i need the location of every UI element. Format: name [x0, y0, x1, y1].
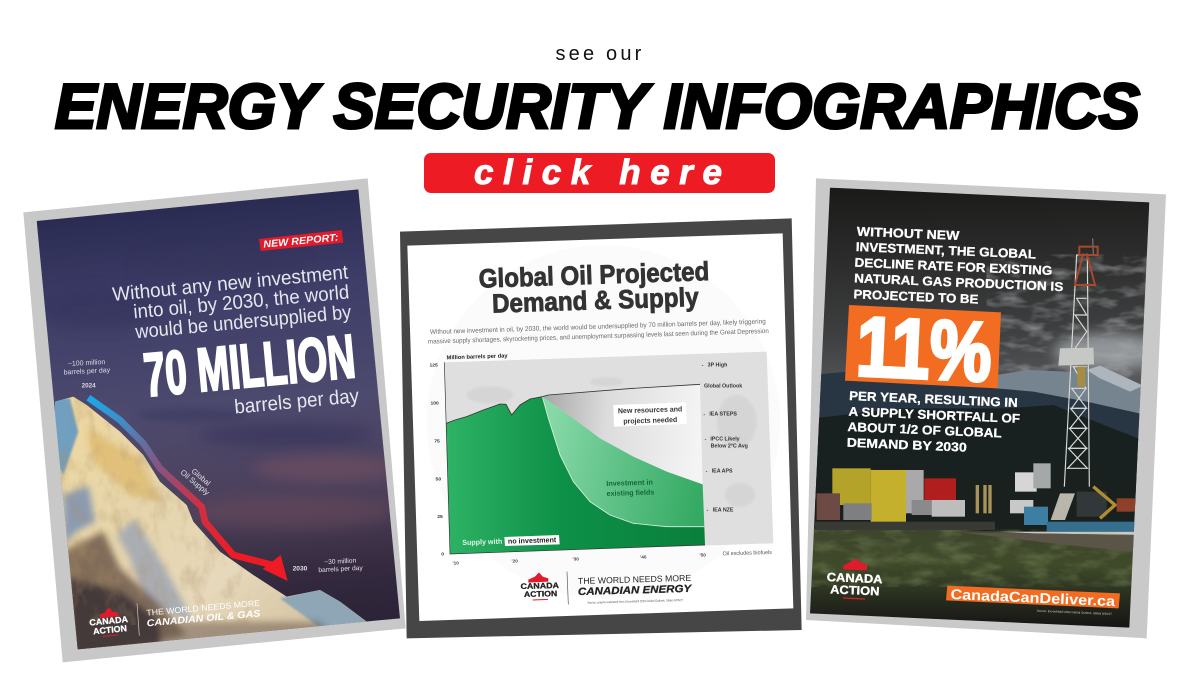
y axis labels: [430, 363, 444, 558]
headline: Without any new investment: [111, 261, 350, 306]
investment in existing fields area: [542, 397, 704, 527]
chart title: Demand & Supply: [492, 282, 699, 319]
scenario labels: -: [706, 469, 708, 475]
ground: [807, 528, 1140, 632]
kicker: see our: see our: [555, 43, 645, 65]
scenario labels: IEA NZE: [713, 507, 734, 513]
source note: Source: ExxonMobil 2023 Global Outlook, Slides 8/26/27: [1037, 609, 1112, 616]
new resources label: New resources and: [618, 404, 682, 415]
y axis labels: 100: [431, 401, 439, 407]
scenario labels: IEA APS: [712, 469, 733, 475]
scenario labels: -: [705, 437, 707, 443]
barrels per day: barrels per day: [233, 385, 360, 419]
x axis labels: '50: [700, 552, 706, 557]
lower statement: DEMAND BY 2030: [847, 436, 967, 455]
scenario labels: -: [703, 412, 705, 418]
y axis labels: 25: [437, 514, 443, 520]
logo: canada action: [89, 603, 139, 636]
panel: 11 percent natural gas poster: [800, 175, 1167, 638]
lower statement: PER YEAR, RESULTING IN: [849, 389, 1018, 410]
upper statement: DECLINE RATE FOR EXISTING: [854, 256, 1053, 278]
new resources label: projects needed: [623, 415, 677, 426]
supply with no investment area: [446, 397, 705, 554]
y axis labels: 125: [430, 363, 438, 369]
poster paper: [407, 233, 793, 621]
declining supply arrow: [88, 398, 288, 581]
end label 2030: [293, 557, 364, 574]
x axis labels: '20: [512, 559, 518, 564]
chart title: Global Oil Projected: [478, 256, 710, 294]
scenario labels: -: [702, 363, 704, 369]
start label 2024: [63, 359, 111, 389]
decline curve line: [542, 397, 704, 527]
chart subtitle: [428, 318, 769, 346]
click here button: [424, 153, 775, 193]
upper statement: NATURAL GAS PRODUCTION IS: [854, 271, 1064, 294]
upper statement: WITHOUT NEW: [857, 225, 960, 243]
big number: 70 million: 70 MILLION: [141, 321, 358, 409]
start label 2024: ~100 million: [68, 359, 106, 368]
end label 2030: barrels per day: [318, 565, 364, 574]
tagline: THE WORLD NEEDS MORE: [578, 573, 692, 586]
global oil supply label: Global: [190, 467, 213, 488]
scenario labels: IPCC Likely: [710, 436, 740, 442]
main title: ENERGY SECURITY INFOGRAPHICS: [55, 72, 1140, 142]
no investment label: Supply with: [462, 537, 503, 547]
no investment label: no investment: [508, 535, 557, 546]
tagline: CANADIAN ENERGY: [578, 584, 693, 598]
upper statement: INVESTMENT, THE GLOBAL: [856, 240, 1037, 262]
tanks and site buildings: [815, 463, 1135, 532]
logo: canada action: [827, 558, 883, 599]
investment label: existing fields: [606, 488, 654, 498]
logo: canada action: CANADA: [520, 581, 559, 591]
start label 2024: barrels per day: [63, 367, 111, 377]
investment label: [606, 478, 654, 498]
investment label: Investment in: [606, 478, 654, 488]
website badge: CanadaCanDeliver.ca: [950, 587, 1117, 610]
y axis labels: 0: [441, 552, 444, 558]
chart subtitle: massive supply shortages, skyrocketing prices, and unemployment surpassing levels last seen during the Great Depression: [428, 328, 769, 346]
global outlook line: [446, 384, 700, 423]
axes: [444, 362, 705, 554]
x axis labels: '30: [573, 557, 579, 562]
new report badge: NEW REPORT:: [263, 232, 339, 251]
headline: would be undersupplied by: [134, 301, 352, 343]
logo: canada action: CANADA: [89, 614, 129, 628]
upper statement: [853, 225, 1064, 307]
tagline: [578, 573, 693, 598]
poster frame: [23, 178, 406, 662]
click here button: click here: [474, 153, 722, 192]
logo: canada action: ACTION: [93, 623, 127, 636]
panel: global oil demand and supply poster: [400, 218, 802, 638]
scenario labels: -: [707, 508, 709, 514]
source note: Source: graphs replicated from ExxonMobil 2023 Global Outlook, Slides 8/26/27: [587, 598, 684, 605]
x axis labels: [453, 552, 706, 566]
logo: canada action: [520, 572, 568, 604]
headline: into oil, by 2030, the world: [132, 281, 350, 323]
lower statement: ABOUT 1/2 OF GLOBAL: [847, 420, 1002, 440]
y axis title: Million barrels per day: [447, 353, 509, 361]
no investment label: [462, 535, 560, 547]
logo: canada action: ACTION: [524, 589, 558, 599]
poster frame: [400, 218, 802, 638]
lower statement: [847, 389, 1021, 455]
scenario labels: Below 2°C Avg: [711, 443, 748, 449]
poster artwork: [36, 190, 400, 650]
mountain: [54, 396, 366, 650]
end label 2030: 2030: [293, 566, 308, 573]
biofuels note: Oil excludes biofuels: [723, 550, 772, 557]
faint world map: [467, 377, 757, 507]
y axis labels: 50: [436, 476, 441, 482]
new resources label: [613, 402, 687, 427]
tagline: CANADIAN OIL & GAS: [146, 608, 261, 629]
drilling rig: [1058, 238, 1098, 487]
start label 2024: 2024: [82, 382, 96, 389]
tagline: THE WORLD NEEDS MORE: [146, 598, 261, 618]
lower statement: A SUPPLY SHORTFALL OF: [848, 405, 1021, 426]
end label 2030: ~30 million: [324, 557, 357, 566]
poster artwork: [810, 188, 1150, 628]
scenario labels: Global Outlook: [704, 384, 742, 390]
panel: 70 million poster: [20, 175, 420, 668]
faint globe: [427, 245, 780, 598]
global oil supply label: Oil Supply: [179, 468, 211, 497]
tagline: [146, 598, 261, 629]
scenario labels: 3P High: [708, 363, 727, 369]
x axis labels: '40: [640, 555, 647, 560]
chart title: [478, 256, 710, 319]
poster frame: [806, 178, 1166, 638]
y axis labels: 75: [434, 438, 440, 444]
logo: canada action: CANADA: [827, 570, 883, 586]
chart backdrop: [444, 352, 773, 554]
chart subtitle: Without new investment in oil, by 2030, the world would be undersupplied by 70 million barrels per day, likely triggering: [430, 318, 766, 336]
area chart: [444, 352, 773, 554]
new resources area: [542, 385, 703, 484]
logo: canada action: ACTION: [830, 582, 880, 598]
orange highlight with 11%: 11%: [855, 299, 994, 399]
scenario labels: IEA STEPS: [709, 412, 737, 418]
scenario labels: [702, 363, 748, 514]
mountains: [997, 366, 1147, 428]
x axis labels: '10: [453, 561, 459, 566]
upper statement: PROJECTED TO BE: [853, 287, 979, 307]
headline: [111, 261, 352, 343]
